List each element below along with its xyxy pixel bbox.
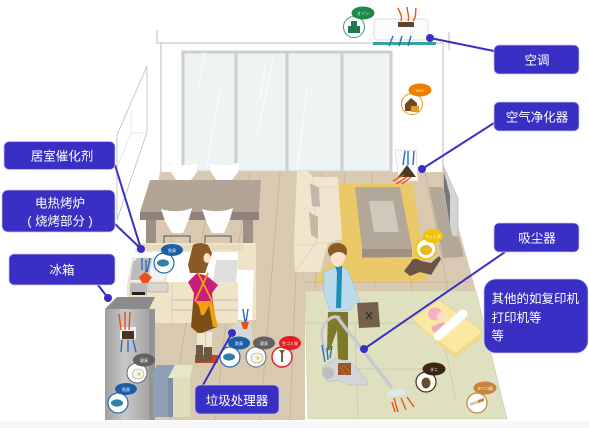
- baby on futon: [412, 300, 483, 358]
- trash bag disposer: [228, 309, 253, 344]
- air purifier: [393, 150, 418, 184]
- room wall outline: [157, 30, 449, 172]
- leader line: air conditioner: [426, 34, 494, 51]
- label: garbage disposer: 垃圾处理器: [206, 393, 269, 408]
- label: vacuum cleaner: [494, 223, 579, 252]
- kitchen burner filter icon: [139, 258, 152, 283]
- egg odour badge near trash: [246, 336, 275, 367]
- tv stand: [429, 165, 463, 258]
- leader line: air purifier: [418, 123, 494, 173]
- fish odour badge near trash: [220, 336, 250, 367]
- VOC badge: VOC: [416, 88, 424, 93]
- man with vacuum cleaner: [324, 243, 360, 360]
- kitchen counter: [127, 243, 256, 323]
- pet odour badge: [416, 229, 443, 259]
- leader line: garbage disposer: [203, 329, 236, 385]
- label: toaster oven: 电热烤炉: [35, 196, 85, 210]
- label: air conditioner: 空调: [524, 54, 550, 68]
- fridge: [105, 297, 155, 420]
- sofa: [294, 171, 342, 272]
- label: air conditioner: [494, 45, 579, 74]
- wood floor: [140, 172, 476, 420]
- dog: [404, 256, 441, 276]
- label: living room catalyst: 居室催化剂: [31, 148, 93, 164]
- label: toaster oven: [2, 190, 115, 232]
- label: air purifier: 空气净化器: [506, 110, 569, 124]
- egg odour badge on fridge: [127, 354, 155, 383]
- fish odour badge on counter: [154, 244, 183, 273]
- side glass shelf: [117, 66, 147, 220]
- woman at kitchen sink: [188, 243, 218, 363]
- label: toaster oven: ( 烧烤部分 ): [27, 214, 93, 228]
- cushion: [357, 302, 380, 328]
- fish odour badge on counter: 魚臭: [168, 247, 176, 253]
- fish odour badge on fridge: [108, 383, 137, 413]
- fish odour badge on fridge: 魚臭: [122, 386, 130, 392]
- vacuum cleaner: [322, 317, 414, 412]
- label: refrigerator: [9, 254, 115, 285]
- garbage odour badge red: 生ゴミ臭: [282, 340, 298, 346]
- window: [183, 52, 391, 172]
- label: other copiers and printers: 等: [492, 328, 504, 343]
- VOC badge: [402, 84, 432, 114]
- pet odour badge: ペット臭: [425, 233, 441, 239]
- egg odour badge on fridge: 腐臭: [140, 357, 148, 363]
- tobacco odour badge: [467, 382, 496, 413]
- leader line: vacuum: [360, 252, 505, 353]
- tatami mat: [305, 291, 507, 419]
- coffee table: [355, 187, 412, 258]
- label: vacuum cleaner: 吸尘器: [518, 232, 556, 246]
- label: other copiers and printers: 打印机等: [492, 310, 542, 325]
- label: other copiers and printers: [484, 279, 588, 353]
- label: other copiers and printers: 其他的如复印机: [492, 291, 580, 306]
- leader line: living room catalyst: [115, 165, 145, 253]
- ozone badge: オゾン: [357, 11, 369, 16]
- yellow rug: [314, 184, 427, 281]
- garbage odour badge red: [272, 336, 301, 367]
- mite badge: ダニ: [430, 366, 438, 372]
- label: air purifier: [494, 102, 579, 131]
- egg odour badge near trash: 腐臭: [260, 340, 268, 346]
- leader line: toaster oven: [115, 224, 139, 247]
- dining table with chairs: [140, 162, 261, 244]
- mite badge: [416, 362, 446, 392]
- tobacco odour badge: タバコ臭: [477, 385, 493, 391]
- leader line: fridge: [98, 285, 112, 302]
- ozone badge: [344, 6, 374, 38]
- air conditioner: [373, 7, 436, 46]
- label: garbage disposer: [195, 385, 279, 414]
- label: living room catalyst: [4, 142, 115, 170]
- trash bins: [150, 365, 193, 417]
- label: refrigerator: 冰箱: [49, 262, 75, 278]
- fish odour badge near trash: 魚臭: [235, 340, 243, 346]
